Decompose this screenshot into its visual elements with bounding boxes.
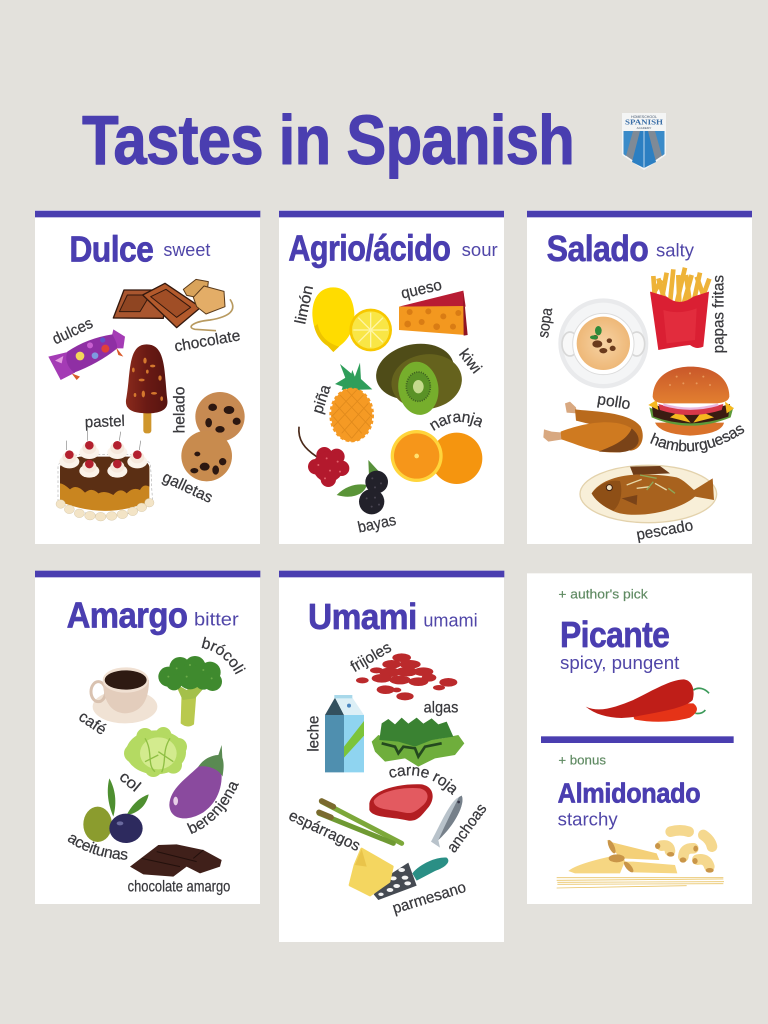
icon: eggplant xyxy=(169,745,224,818)
icon: asparagus xyxy=(319,801,402,843)
title: Tastes in Spanish xyxy=(82,101,574,179)
logo: Homeschool Spanish Academy shield: HOMESCHOOL xyxy=(631,115,657,119)
label: piña: piña xyxy=(309,382,335,416)
subheading: salty: salty xyxy=(656,240,695,261)
label: limón: limón xyxy=(292,284,317,326)
icon: kiwi xyxy=(371,337,465,418)
icon: steak xyxy=(369,784,433,821)
logo: Homeschool Spanish Academy shield: ACADEMY xyxy=(637,126,651,130)
icon: pineapple xyxy=(331,363,373,442)
icon: seaweed xyxy=(372,718,464,767)
subheading: sweet: sweet xyxy=(163,239,211,260)
label: galletas: galletas xyxy=(160,469,215,507)
subheading: spicy, pungent: spicy, pungent xyxy=(560,652,680,673)
subheading: starchy: starchy xyxy=(558,808,618,829)
icon: cookies xyxy=(181,392,245,481)
label: queso: queso xyxy=(399,277,444,303)
icon: wrapped candy xyxy=(48,329,125,380)
icon: cabbage xyxy=(124,727,187,777)
label: chocolate: chocolate xyxy=(173,327,242,356)
label: dulces: dulces xyxy=(50,315,96,348)
note: author's pick: + author's pick xyxy=(558,588,648,602)
icon: chocolate and caramel xyxy=(113,279,233,331)
label: chocolate amargo: chocolate amargo xyxy=(128,879,231,896)
icon: dark chocolate xyxy=(130,844,222,877)
label: algas: algas xyxy=(424,700,458,717)
icon: fish on plate xyxy=(580,465,717,523)
icon: lemon xyxy=(312,287,392,352)
label: col: col xyxy=(116,768,144,796)
icon: raspberries xyxy=(299,427,349,487)
logo: Homeschool Spanish Academy shield xyxy=(622,113,666,170)
icon: chicken xyxy=(543,402,643,452)
label: pollo: pollo xyxy=(596,391,632,413)
label: frijoles: frijoles xyxy=(348,639,395,676)
logo: Homeschool Spanish Academy shield: SPANISH xyxy=(625,118,664,126)
label: kiwi: kiwi xyxy=(455,346,485,377)
icon: coffee cup xyxy=(91,667,157,723)
subheading: bitter: bitter xyxy=(194,608,239,629)
heading: Umami: Umami xyxy=(308,596,417,637)
icon: milk carton xyxy=(325,695,364,772)
icon: cheese xyxy=(399,291,468,336)
label: leche: leche xyxy=(305,715,322,752)
panel: Amargo bitter xyxy=(35,570,260,904)
subheading: sour: sour xyxy=(462,239,498,260)
label: carne roja: carne roja xyxy=(389,766,456,795)
panel: Dulce sweet xyxy=(35,210,260,544)
icon: orange xyxy=(391,430,482,484)
label: brócoli: brócoli xyxy=(202,636,246,674)
icon: chocolate ice cream xyxy=(126,344,167,433)
heading: Agrio/ácido: Agrio/ácido xyxy=(288,227,450,268)
label: parmesano: parmesano xyxy=(391,879,468,917)
icon: pasta xyxy=(557,830,724,888)
label: pastel: pastel xyxy=(85,413,125,431)
heading: Picante: Picante xyxy=(560,614,669,655)
heading: Almidonado: Almidonado xyxy=(558,778,700,809)
panel: Agrio/ácido sour xyxy=(279,210,504,544)
label: bayas: bayas xyxy=(356,512,398,537)
icon: parmesan and grater xyxy=(350,849,448,900)
panel: Picante and Almidonado xyxy=(527,573,752,904)
label: hamburguesas: hamburguesas xyxy=(650,425,744,453)
icon: french fries xyxy=(650,268,709,350)
icon: kidney beans xyxy=(356,653,457,700)
label: anchoas: anchoas xyxy=(444,801,491,856)
subheading: umami: umami xyxy=(423,609,478,630)
panel: Umami xyxy=(279,570,504,942)
heading: Salado: Salado xyxy=(547,228,648,269)
label: café: café xyxy=(75,708,109,739)
icon: cake xyxy=(56,430,154,521)
icon: broccoli xyxy=(158,656,222,726)
divider bar xyxy=(541,736,734,743)
label: papas fritas: papas fritas xyxy=(711,275,728,353)
label: sopa: sopa xyxy=(535,307,556,339)
icon: olives xyxy=(83,778,149,843)
icon: hamburger xyxy=(648,367,734,436)
label: helado: helado xyxy=(172,386,189,433)
icon: bowl of soup xyxy=(558,298,648,388)
icon: chili peppers xyxy=(586,679,709,722)
label: berenjena: berenjena xyxy=(186,782,239,834)
heading: Dulce: Dulce xyxy=(69,228,153,269)
panel: Salado salty xyxy=(527,210,752,544)
icon: blackberries xyxy=(337,460,388,514)
label: naranja: naranja xyxy=(430,412,482,431)
label: aceitunas: aceitunas xyxy=(68,834,128,860)
heading: Amargo: Amargo xyxy=(67,594,187,635)
note: bonus: + bonus xyxy=(558,753,606,767)
icon: anchovy xyxy=(431,796,463,848)
label: espárragos: espárragos xyxy=(286,807,363,855)
label: pescado: pescado xyxy=(635,517,695,544)
